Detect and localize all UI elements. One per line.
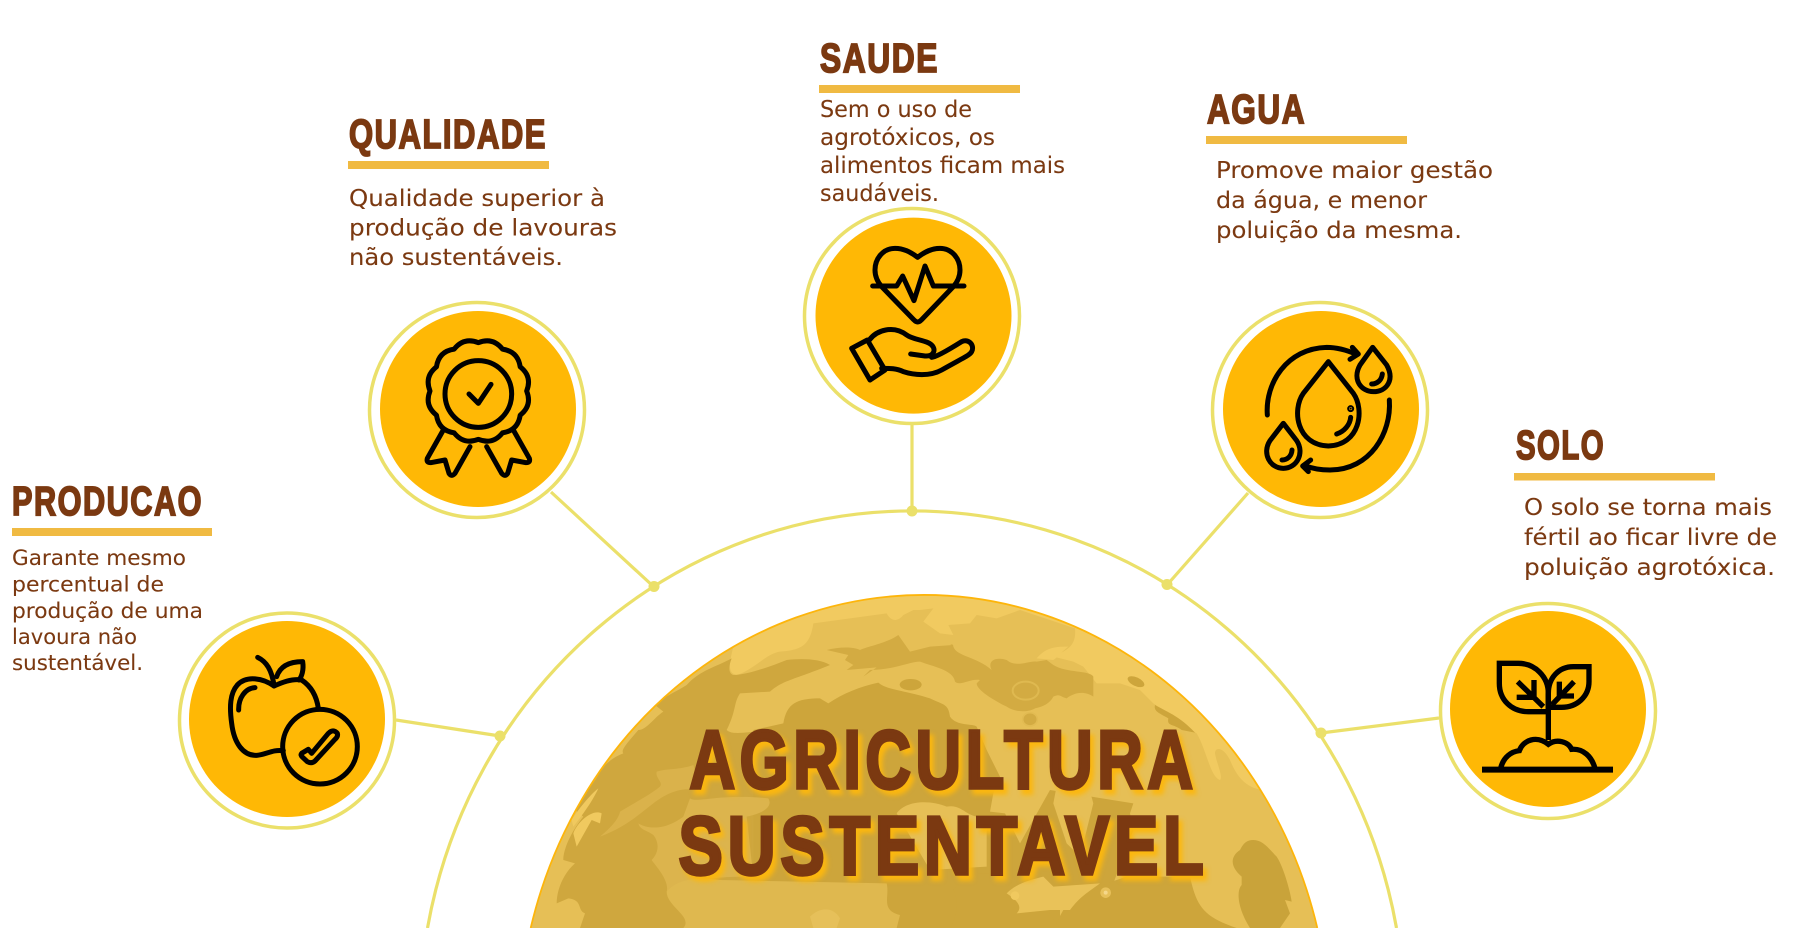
panel: agua: [1206, 86, 1493, 518]
heading: producao: PRODUCAO: [12, 478, 203, 524]
icon: heart in hand: [804, 208, 1020, 424]
panel: qualidade: [348, 111, 617, 518]
text: qualidade: não sustentáveis.: [349, 243, 563, 271]
text: agua: poluição da mesma.: [1216, 216, 1462, 244]
text: saude: Sem o uso de: [820, 95, 972, 123]
text: saude: alimentos ficam mais: [820, 151, 1065, 179]
heading: agua: AGUA: [1207, 86, 1306, 132]
icon: water cycle: [1212, 302, 1428, 518]
text: agua: Promove maior gestão: [1216, 156, 1493, 184]
text: solo: [1524, 493, 1777, 581]
text: qualidade: produção de lavouras: [349, 214, 617, 242]
text: solo: poluição agrotóxica.: [1524, 553, 1775, 581]
heading: saude: SAUDE: [820, 35, 939, 81]
text: agua: da água, e menor: [1216, 186, 1427, 214]
icon: medal: [370, 302, 584, 518]
icon: sprout: [1440, 604, 1656, 818]
icon: apple with check: [180, 613, 394, 828]
title: AGRICULTURA: [690, 713, 1198, 806]
panel: producao: [12, 478, 394, 828]
text: producao: Garante mesmo: [12, 546, 186, 570]
text: qualidade: Qualidade superior à: [349, 184, 605, 212]
text: producao: percentual de: [12, 572, 164, 596]
text: qualidade: [349, 184, 617, 271]
text: producao: sustentável.: [12, 651, 143, 675]
text: solo: O solo se torna mais: [1524, 493, 1772, 521]
panel: saude: [804, 35, 1065, 424]
text: producao: produção de uma: [12, 599, 203, 623]
heading: solo: SOLO: [1516, 422, 1605, 468]
text: producao: lavoura não: [12, 625, 137, 649]
panel: solo: [1440, 422, 1777, 818]
title: SUSTENTAVEL: [678, 799, 1208, 892]
text: saude: agrotóxicos, os: [820, 123, 995, 151]
text: saude: saudáveis.: [820, 179, 939, 207]
heading: qualidade: QUALIDADE: [349, 111, 547, 157]
moon globe: [531, 583, 1353, 928]
text: agua: [1216, 156, 1493, 244]
text: saude: [820, 95, 1065, 207]
outer arc with connectors: [396, 425, 1439, 928]
text: solo: fértil ao ficar livre de: [1524, 523, 1777, 551]
text: producao: [12, 546, 203, 675]
title: [678, 713, 1208, 892]
